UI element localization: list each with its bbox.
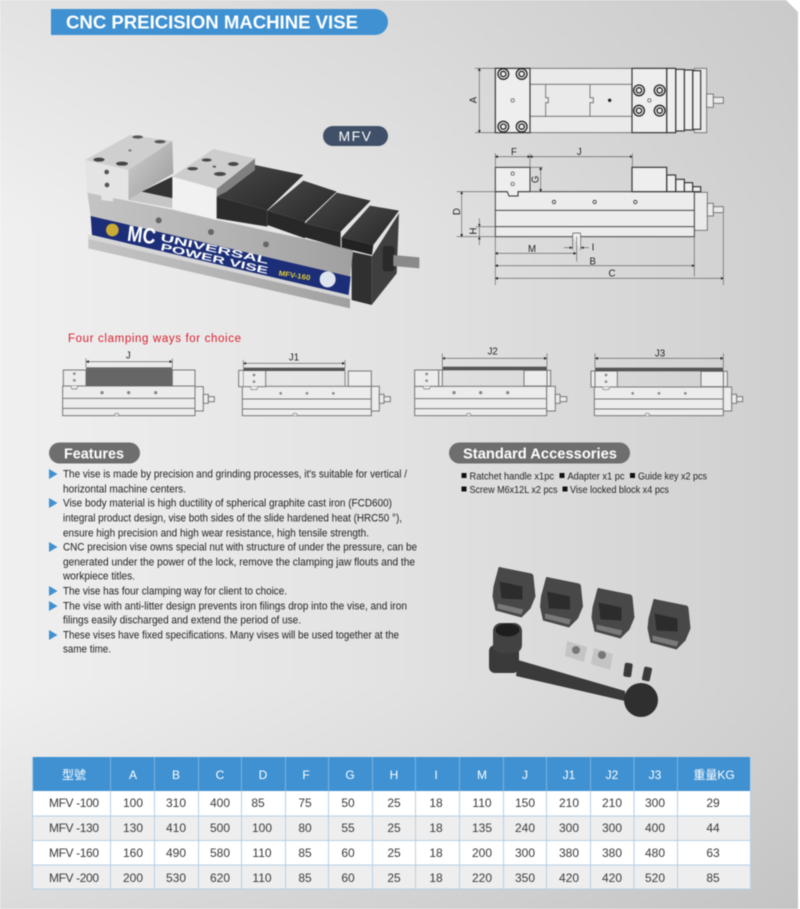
row MFV-130: 400 [645, 821, 665, 835]
table header: F [302, 768, 310, 782]
row MFV-130 [49, 821, 720, 835]
row MFV-100: 85 [251, 796, 265, 810]
row MFV-100: 100 [123, 796, 143, 810]
dimensions D H [452, 192, 495, 245]
clamping way J: J [126, 351, 131, 362]
clamping way J2: J2 [488, 346, 498, 357]
clamping way J3 [591, 349, 743, 416]
row MFV-200: 110 [252, 871, 272, 885]
rear steps and screw [667, 68, 723, 133]
feature text: Vise body material is high ductility of spherical graphite cast iron (FCD600) [63, 498, 392, 510]
feature text: CNC precision vise owns special nut with structure of under the pressure, can be [63, 542, 417, 554]
table header: G [345, 768, 355, 782]
title banner [51, 9, 388, 35]
dimensions D H: H [468, 227, 479, 234]
row MFV-100: 310 [166, 796, 186, 810]
dimensions M I B C: C [609, 268, 616, 279]
table header: A [129, 768, 137, 782]
row MFV-200: 350 [515, 871, 535, 885]
row MFV-100: 110 [472, 796, 492, 810]
row MFV-160: 160 [123, 846, 143, 860]
movable jaw and steps [632, 167, 701, 192]
row MFV-130: 410 [166, 821, 186, 835]
row MFV-160: 18 [429, 846, 443, 860]
clamping way J1: J1 [289, 353, 299, 364]
dimensions M I B C: B [589, 256, 596, 267]
row MFV-100: 300 [645, 796, 665, 810]
table header: H [390, 768, 398, 782]
table header: 重量KG [693, 768, 735, 782]
row MFV-130: 500 [210, 821, 230, 835]
row MFV-200: 220 [472, 871, 492, 885]
blue nameplate: UNIVERSAL [159, 233, 269, 267]
row MFV-200: 420 [602, 871, 622, 885]
black stepped jaw 3 [305, 193, 371, 247]
table header: D [259, 768, 268, 782]
technical drawing: top view [468, 68, 723, 133]
row MFV-200: 420 [559, 871, 579, 885]
row MFV-130: 55 [341, 821, 355, 835]
dimensions D H: D [452, 208, 463, 215]
accessories list: Vise locked block x4 pcs [570, 485, 669, 496]
row MFV-160: 300 [515, 846, 535, 860]
feature text: The vise is made by precision and grinding processes, it's suitable for vertical / [63, 468, 407, 480]
product photo: MC universal power vise [85, 135, 419, 308]
row MFV-100: 210 [602, 796, 622, 810]
accessories list: Screw M6x12L x2 pcs [470, 485, 558, 496]
dimensions M I B C: M [528, 244, 536, 255]
row MFV-130: 100 [252, 821, 272, 835]
title banner: CNC PREICISION MACHINE VISE [66, 12, 358, 32]
row MFV-200 [49, 871, 720, 885]
row MFV-160: MFV -160 [49, 846, 99, 860]
row MFV-200: 530 [166, 871, 186, 885]
dimensions F J G: F [511, 147, 517, 158]
dimension A: A [468, 96, 479, 103]
row MFV-160: 490 [166, 846, 186, 860]
centre body [530, 68, 632, 133]
screws [623, 663, 652, 682]
feature text: The vise with anti-litter design prevents iron filings drop into the vise, and iron [63, 600, 407, 612]
technical drawing: side view [452, 147, 723, 285]
fixed jaw [85, 135, 173, 208]
upper body holes [156, 217, 269, 247]
row MFV-100: 18 [429, 796, 443, 810]
row MFV-160: 63 [706, 846, 720, 860]
table header: M [477, 768, 487, 782]
row MFV-160: 380 [559, 846, 579, 860]
dimensions F J G: J [577, 147, 582, 158]
standard accessories heading: Standard Accessories [463, 446, 617, 462]
row MFV-160: 60 [341, 846, 355, 860]
table header: J3 [649, 768, 662, 782]
table header: I [434, 768, 438, 782]
row MFV-130: 80 [298, 821, 312, 835]
accessories list: Adapter x1 pc [568, 472, 624, 482]
row MFV-200: 620 [210, 871, 230, 885]
dimensions M I B C: I [592, 242, 594, 253]
features list [49, 468, 417, 656]
row MFV-200: 85 [706, 871, 720, 885]
row MFV-130: MFV -130 [49, 821, 99, 835]
blue nameplate: MC [126, 221, 157, 249]
bullet icons [49, 469, 58, 640]
table header: 型號 [62, 768, 86, 782]
row MFV-160: 110 [252, 846, 272, 860]
table header: C [216, 768, 225, 782]
black stepped jaw 2 [267, 181, 337, 238]
clamping way J2 [415, 346, 567, 416]
table row backgrounds [32, 757, 750, 889]
row MFV-130: 25 [387, 821, 401, 835]
feature text: generated under the power of the lock, remove the clamping jaw flouts and the [63, 556, 415, 568]
row MFV-130: 240 [515, 821, 535, 835]
lower base [88, 235, 350, 308]
table header [32, 757, 750, 791]
row MFV-200: MFV -200 [49, 871, 99, 885]
features heading [49, 442, 140, 464]
feature text: The vise has four clamping way for client to choice. [63, 586, 287, 598]
right clamping plate [632, 68, 667, 133]
blue nameplate: MFV-160 [278, 268, 311, 282]
row MFV-200: 200 [123, 871, 143, 885]
clamping way J1 [239, 353, 390, 416]
table header: J1 [563, 768, 576, 782]
row MFV-100: 400 [210, 796, 230, 810]
vise body [495, 192, 723, 250]
row MFV-200: 85 [298, 871, 312, 885]
row MFV-160: 580 [210, 846, 230, 860]
row MFV-100: 50 [341, 796, 355, 810]
clamping way J3: J3 [655, 349, 665, 360]
fixed jaw [495, 167, 530, 196]
black stepped jaw 4 [342, 206, 399, 255]
feature text: filings easily discharged and extend the period of use. [63, 614, 301, 626]
dimensions F J G [495, 147, 632, 192]
row MFV-130: 130 [123, 821, 143, 835]
specification table [32, 757, 750, 889]
left clamping plate [495, 68, 530, 133]
guide keys [565, 641, 613, 670]
feature text: horizontal machine centers. [63, 484, 186, 496]
row MFV-160: 380 [602, 846, 622, 860]
row MFV-200: 520 [645, 871, 665, 885]
row MFV-130: 44 [706, 821, 720, 835]
series label: MFV: MFV [338, 128, 373, 144]
row MFV-200: 18 [429, 871, 443, 885]
vise locked blocks [492, 567, 690, 650]
dimensions F J G: G [530, 176, 541, 183]
clamping way J [63, 351, 214, 416]
table header: J2 [606, 768, 619, 782]
row MFV-160: 25 [387, 846, 401, 860]
row MFV-130: 135 [472, 821, 492, 835]
row MFV-100: MFV -100 [49, 796, 99, 810]
end block and screw [352, 213, 419, 305]
row MFV-100: 210 [559, 796, 579, 810]
accessories list [462, 472, 707, 496]
clamping ways heading: Four clamping ways for choice [68, 333, 241, 345]
row MFV-160: 480 [645, 846, 665, 860]
movable jaw [172, 149, 255, 220]
accessories list: Guide key x2 pcs [638, 472, 707, 482]
ratchet handle [489, 623, 658, 717]
dimensions M I B C [495, 213, 723, 285]
series label: MFV [323, 126, 388, 146]
features heading: Features [64, 446, 124, 462]
table header: B [172, 768, 180, 782]
blue nameplate: POWER VISE [159, 242, 270, 277]
row MFV-100: 25 [387, 796, 401, 810]
row MFV-130: 300 [602, 821, 622, 835]
dimension A [468, 68, 495, 133]
row MFV-100: 75 [298, 796, 312, 810]
row MFV-130: 18 [429, 821, 443, 835]
row MFV-160 [49, 846, 720, 860]
row MFV-100: 150 [515, 796, 535, 810]
feature text [62, 468, 417, 656]
feature text: These vises have fixed specifications. Many vises will be used together at the [63, 630, 399, 642]
row MFV-200: 60 [341, 871, 355, 885]
feature text: integral product design, vise both sides of the slide hardened heat (HRC50 °), [63, 512, 402, 524]
row MFV-160: 200 [472, 846, 492, 860]
row MFV-160: 85 [298, 846, 312, 860]
black stepped jaw 1 [217, 165, 303, 227]
blue nameplate [91, 216, 351, 295]
feature text: ensure high precision and high wear resistance, high tensile strength. [63, 528, 369, 540]
row MFV-130: 300 [559, 821, 579, 835]
feature text: same time. [63, 644, 111, 656]
upper body [87, 193, 353, 277]
accessories photo [489, 567, 690, 717]
row MFV-200: 25 [387, 871, 401, 885]
feature text: workpiece titles. [62, 570, 135, 582]
table header: J [522, 768, 528, 782]
row MFV-100: 29 [706, 796, 720, 810]
accessories list: Ratchet handle x1pc [470, 472, 554, 482]
row MFV-100 [49, 796, 720, 810]
